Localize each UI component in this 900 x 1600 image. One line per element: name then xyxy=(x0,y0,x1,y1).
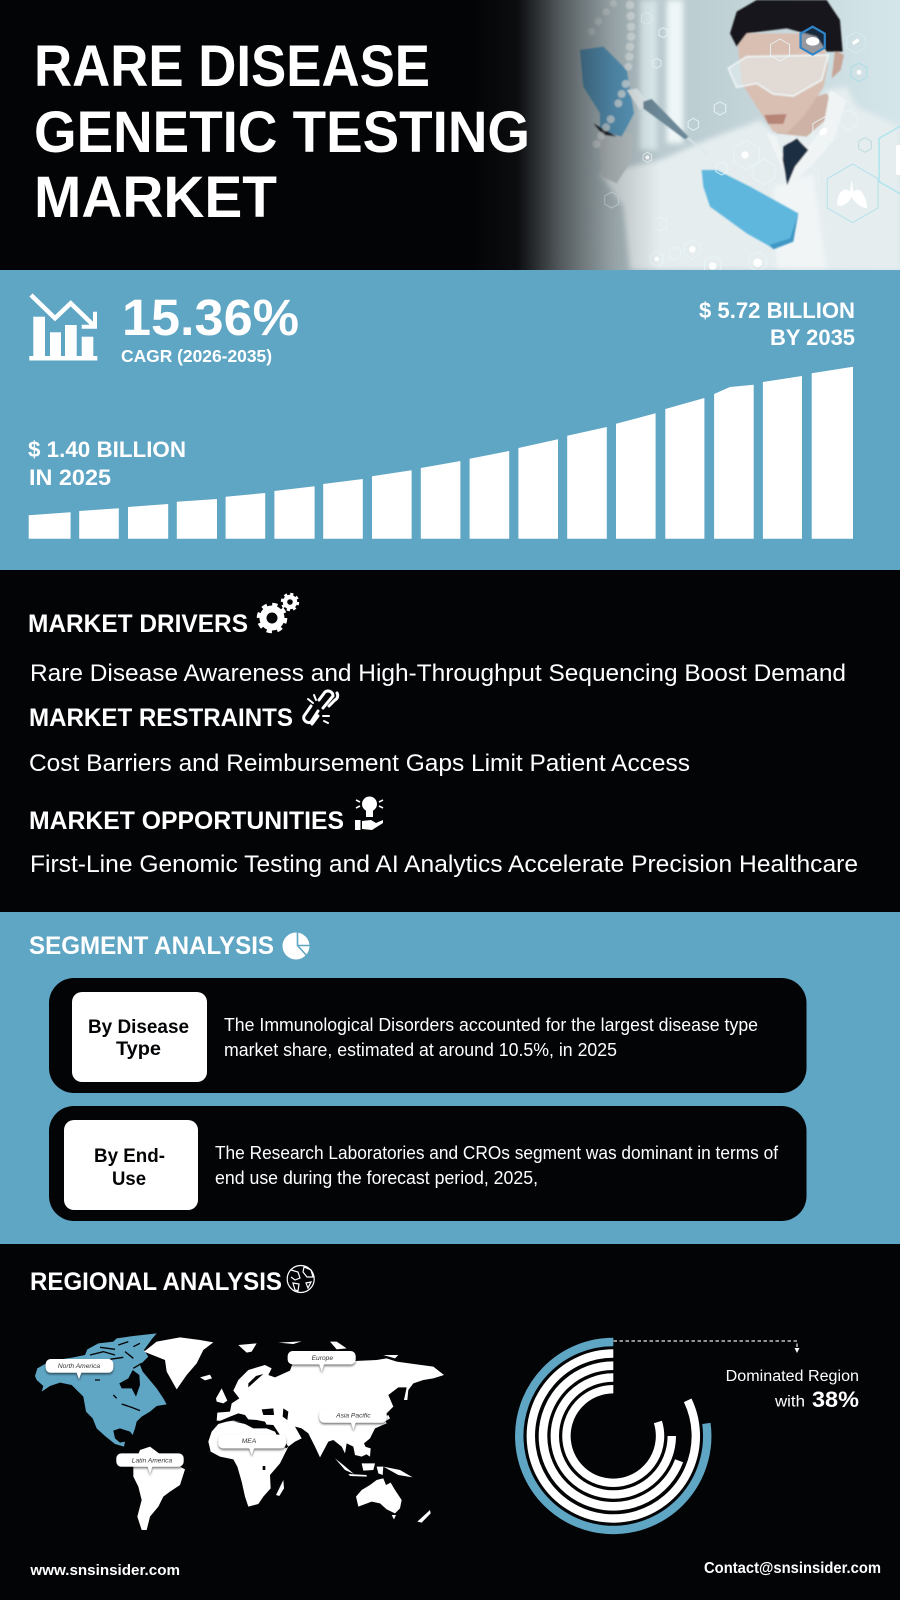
forecast value: BY 2035 xyxy=(770,325,855,350)
card: by end-use: By End- xyxy=(94,1146,165,1167)
forecast value xyxy=(699,298,855,350)
panel: market size xyxy=(0,270,900,570)
icon: bar chart with trend arrow xyxy=(29,295,97,360)
digital hexagon overlays xyxy=(605,12,900,274)
world map xyxy=(35,1333,444,1530)
base value: IN 2025 xyxy=(29,465,111,490)
callout: Asia Pacific xyxy=(319,1409,387,1430)
title xyxy=(34,34,530,230)
dominated region label: 38% xyxy=(812,1387,859,1412)
heading: market restraints: MARKET RESTRAINTS xyxy=(29,704,293,732)
title: RARE DISEASE xyxy=(34,34,430,99)
card: by end-use: Use xyxy=(112,1169,146,1190)
base value xyxy=(28,437,186,490)
callout: Europe xyxy=(288,1351,356,1372)
callout: Latin America: Latin America xyxy=(132,1458,173,1465)
dashed leader arrow xyxy=(614,1341,800,1353)
dominated region label: Dominated Region xyxy=(726,1368,859,1385)
callout: Europe: Europe xyxy=(312,1355,333,1362)
icon: hand with light bulb xyxy=(355,796,383,830)
CAGR label: CAGR (2026-2035) xyxy=(121,346,272,366)
map: north america highlighted xyxy=(35,1333,167,1447)
card: by end-use xyxy=(49,1106,806,1221)
card: by end-use: end use during the forecast period, 2025, xyxy=(215,1168,538,1188)
opportunity text: First-Line Genomic Testing and AI Analytics Accelerate Precision Healthcare xyxy=(30,851,858,878)
callout: Latin America xyxy=(116,1453,184,1474)
panel: segment analysis xyxy=(0,912,900,1244)
header photo: scientist with pipette xyxy=(512,0,900,270)
heading: market opportunities: MARKET OPPORTUNITIES xyxy=(29,807,344,835)
bar chart: growth 2025 to 2035 xyxy=(29,367,853,539)
base value: $ 1.40 BILLION xyxy=(28,437,186,462)
footer: website: www.snsinsider.com xyxy=(29,1562,180,1579)
icon: gears xyxy=(258,594,298,632)
forecast value: $ 5.72 BILLION xyxy=(699,298,855,323)
callout: MEA xyxy=(218,1435,286,1455)
card: by disease type: market share, estimated at around 10.5%, in 2025 xyxy=(224,1040,617,1060)
heading: segment analysis: SEGMENT ANALYSIS xyxy=(29,932,274,960)
icon: pie chart xyxy=(282,932,310,960)
restraint text: Cost Barriers and Reimbursement Gaps Limit Patient Access xyxy=(29,750,690,777)
title: GENETIC TESTING xyxy=(34,100,530,165)
callout: Asia Pacific: Asia Pacific xyxy=(335,1413,371,1420)
map: other continents xyxy=(133,1337,444,1530)
driver text: Rare Disease Awareness and High-Throughput Sequencing Boost Demand xyxy=(30,660,846,687)
card: by end-use: The Research Laboratories and CROs segment was dominant in terms of xyxy=(215,1143,779,1163)
dominated region label xyxy=(726,1368,859,1412)
icon: globe xyxy=(287,1266,314,1292)
callout: MEA: MEA xyxy=(242,1438,257,1445)
CAGR value: 15.36% xyxy=(122,289,299,346)
title: MARKET xyxy=(34,165,277,230)
heading: market drivers: MARKET DRIVERS xyxy=(28,610,248,638)
icon: broken chain link xyxy=(304,691,338,724)
card: by disease type: By Disease xyxy=(88,1017,189,1038)
card: by disease type xyxy=(49,978,806,1093)
DNA helix xyxy=(588,0,635,148)
heading: regional analysis: REGIONAL ANALYSIS xyxy=(30,1268,282,1296)
dominated region label: with xyxy=(774,1394,805,1410)
radial bar chart: regional share xyxy=(519,1342,707,1530)
card: by disease type: Type xyxy=(116,1039,161,1060)
callout: North America xyxy=(46,1359,113,1379)
card: by disease type: The Immunological Disorders accounted for the largest disease type xyxy=(224,1015,758,1035)
photo fade into black xyxy=(470,0,660,270)
footer: contact: Contact@snsinsider.com xyxy=(704,1560,881,1577)
callout: North America: North America xyxy=(58,1363,100,1370)
panel: market dynamics xyxy=(28,594,858,878)
